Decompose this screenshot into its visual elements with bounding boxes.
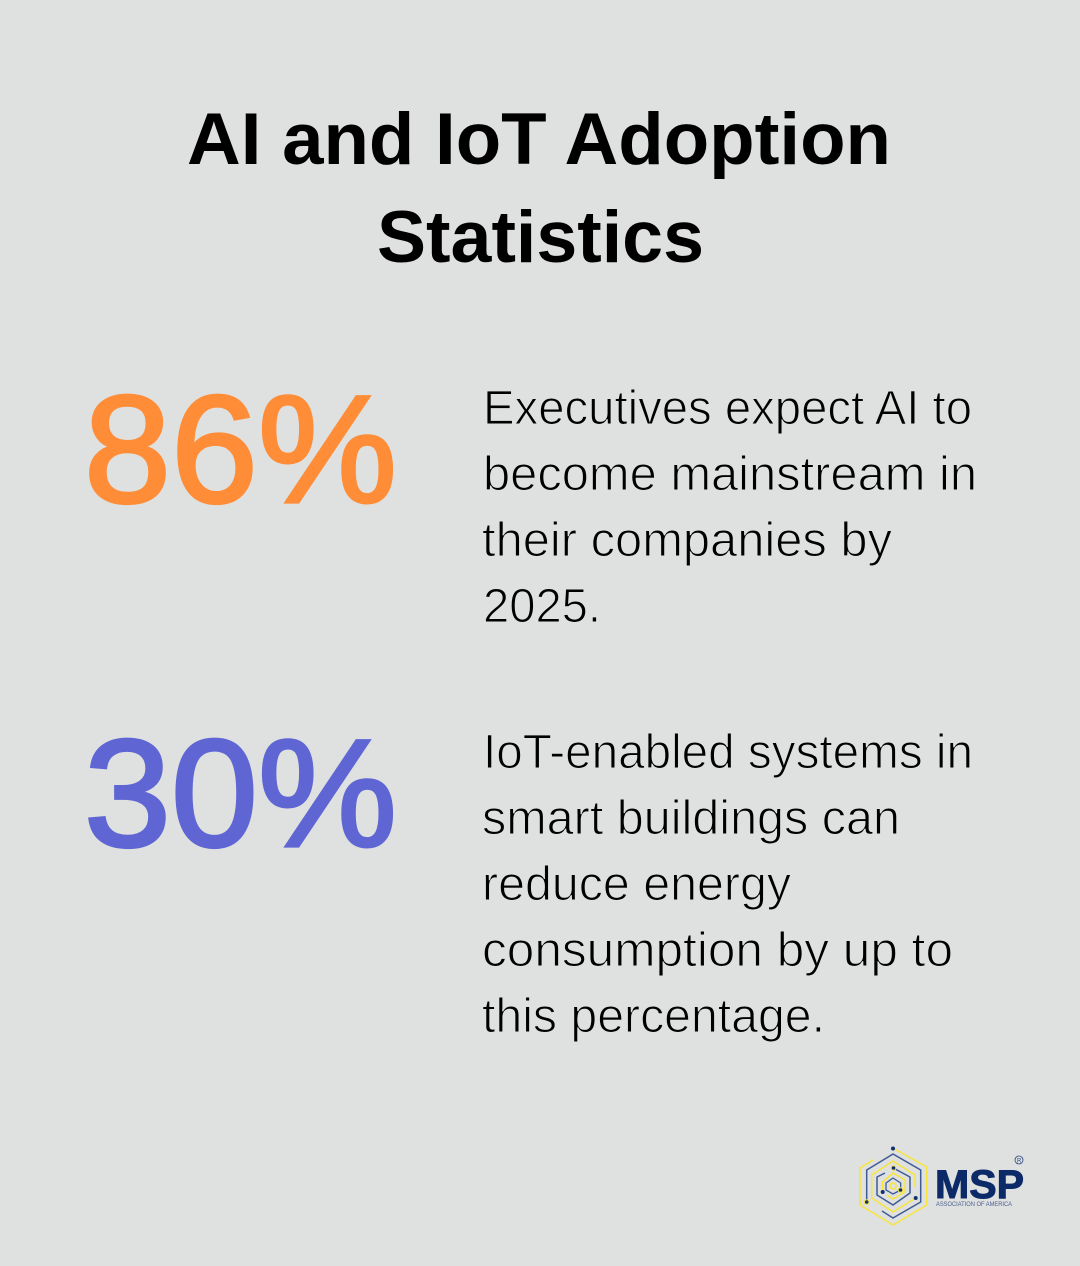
description: IoT energy reduction: smart buildings can [482, 792, 900, 845]
description: IoT energy reduction: IoT-enabled systems in [483, 726, 973, 779]
description: executives expect AI: 2025. [483, 580, 601, 633]
description: IoT energy reduction: this percentage. [482, 990, 825, 1043]
registered mark: R [1017, 1158, 1022, 1164]
registered mark [1015, 1156, 1023, 1164]
description: IoT energy reduction [482, 726, 973, 1043]
description: executives expect AI: become mainstream in [483, 448, 977, 501]
description: IoT energy reduction: reduce energy [482, 858, 791, 911]
description: executives expect AI: Executives expect AI to [483, 382, 972, 435]
statistic: 30% [84, 708, 973, 1043]
icon: circuit hexagon [860, 1146, 927, 1225]
title [187, 99, 891, 278]
logo: MSP Association of America [860, 1146, 1024, 1225]
wordmark: MSP: MSP [935, 1163, 1024, 1207]
description: executives expect AI: their companies by [482, 514, 892, 567]
number: 30%: 30% [84, 708, 397, 879]
number: 86%: 86% [84, 364, 397, 535]
tagline: ASSOCIATION OF AMERICA [936, 1202, 1012, 1208]
title: AI and IoT Adoption [187, 99, 891, 180]
title: Statistics [377, 197, 704, 278]
statistic: 86% [84, 364, 977, 633]
description: executives expect AI [482, 382, 977, 633]
description: IoT energy reduction: consumption by up to [482, 924, 953, 977]
